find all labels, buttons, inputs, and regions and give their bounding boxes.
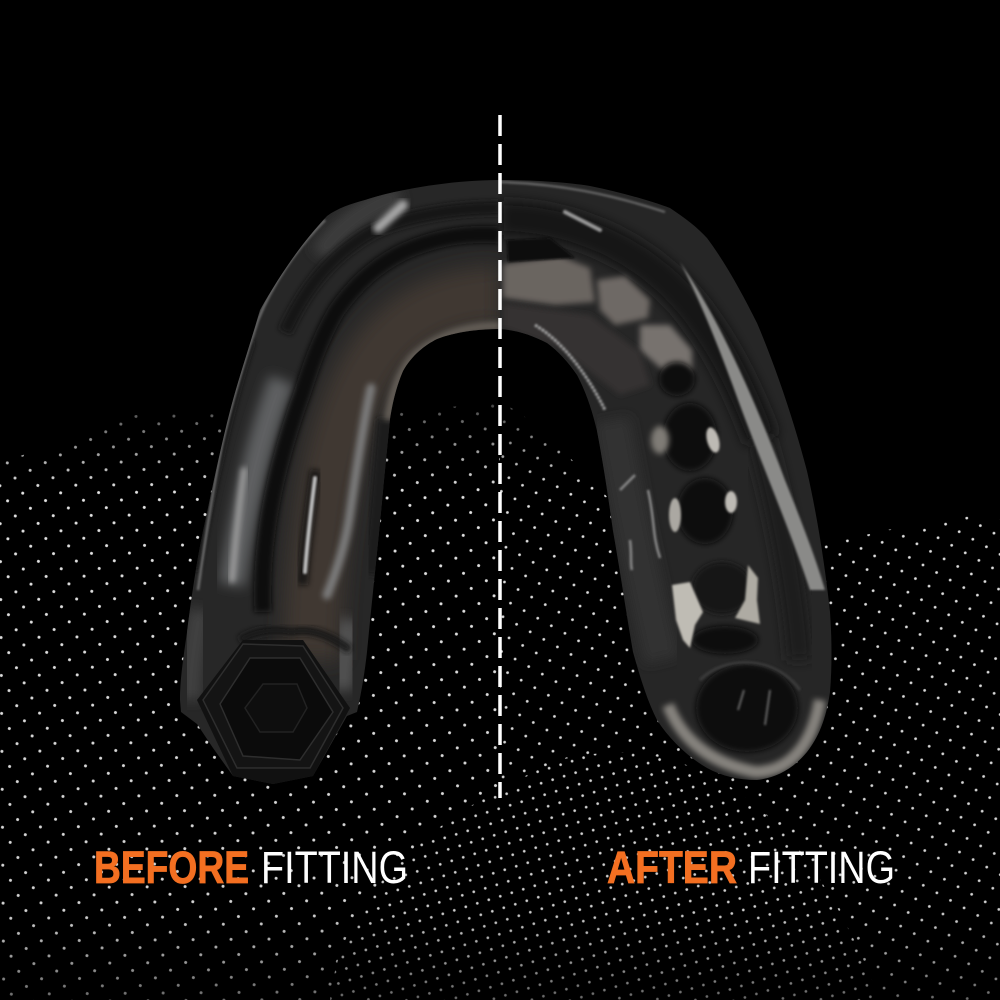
dark upper cavity bbox=[507, 238, 575, 262]
label: before fitting: BEFORE bbox=[94, 842, 249, 893]
mouthguard before fitting, left half bbox=[180, 180, 500, 784]
socket highlights bbox=[704, 426, 722, 454]
hexagonal tab bbox=[197, 640, 350, 784]
end cavity with light rim bbox=[668, 700, 820, 772]
label: after fitting: FITTING bbox=[748, 842, 895, 893]
right top dark band bbox=[500, 218, 762, 440]
left body shading bands bbox=[312, 295, 500, 660]
label: before fitting: FITTING bbox=[261, 842, 408, 893]
light patches of gum impression bbox=[503, 256, 595, 305]
label: after fitting: AFTER bbox=[607, 842, 737, 893]
mouthguard after fitting, right half bbox=[500, 180, 832, 780]
dotted wave terrain bbox=[0, 404, 1000, 1000]
label: after fitting bbox=[607, 842, 895, 893]
tooth sockets bbox=[659, 362, 695, 396]
left gloss highlights bbox=[378, 205, 403, 228]
label: before fitting bbox=[94, 842, 408, 893]
right lower arm shading bbox=[612, 420, 662, 660]
inner-edge gloss bbox=[535, 325, 605, 410]
dashed centre divider bbox=[498, 115, 502, 798]
bright outer edge band bbox=[680, 262, 825, 590]
